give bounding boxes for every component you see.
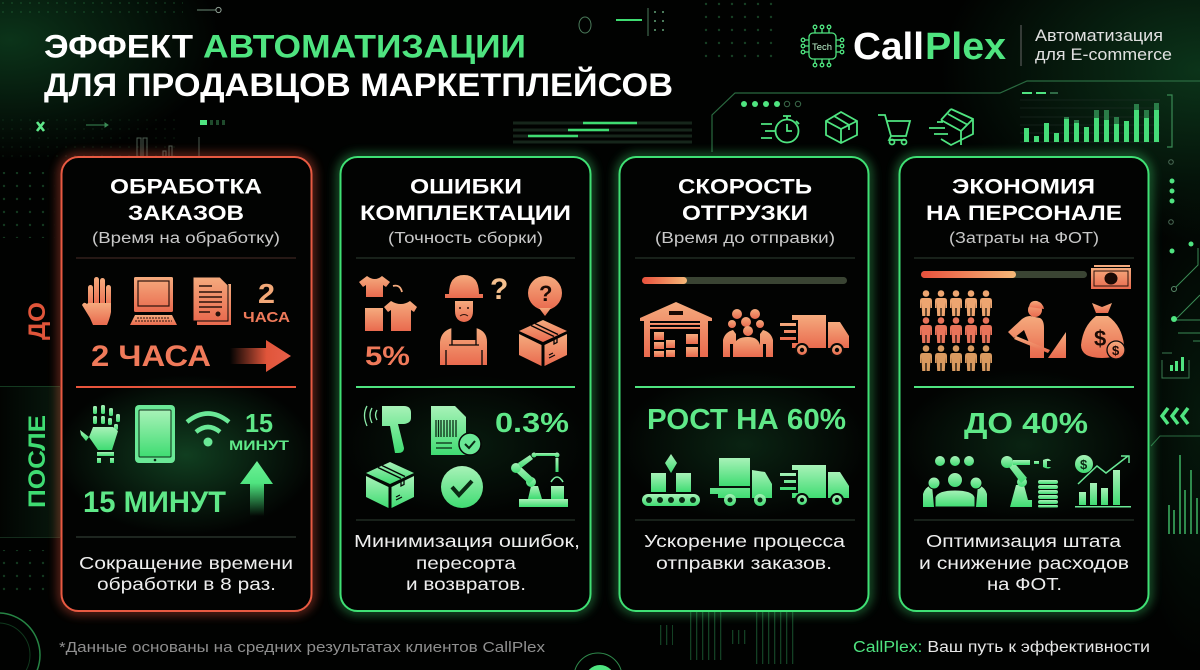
icon: question mark: ? bbox=[490, 273, 508, 306]
description: на ФОТ. bbox=[987, 574, 1062, 594]
icon: hand bbox=[82, 277, 111, 325]
before value: 2 часа small: 2 bbox=[258, 278, 275, 309]
status dots bbox=[741, 101, 801, 107]
side label: ДО: ДО bbox=[24, 302, 51, 340]
progress bar bbox=[921, 271, 1087, 278]
icon: chip: Tech bbox=[812, 42, 832, 52]
icon: money bag: $ bbox=[1112, 343, 1120, 358]
side label: ПОСЛЕ: ПОСЛЕ bbox=[24, 415, 51, 508]
icon: box with question: ? bbox=[539, 281, 552, 306]
result: до 40%: ДО 40% bbox=[964, 408, 1088, 440]
icon: green box bbox=[366, 462, 414, 508]
title: АВТОМАТИЗАЦИИ bbox=[203, 28, 526, 64]
description: отправки заказов. bbox=[656, 553, 832, 573]
bar chart bbox=[1020, 93, 1160, 142]
icon: truck red bbox=[780, 315, 849, 357]
value: 5%: 5% bbox=[365, 341, 410, 371]
icon: wifi bbox=[187, 414, 229, 446]
icon: barcode document bbox=[431, 406, 481, 455]
heading: ОТГРУЗКИ bbox=[682, 202, 808, 225]
icon: document bbox=[193, 277, 231, 325]
description: Ускорение процесса bbox=[644, 531, 845, 551]
heading bbox=[926, 176, 1122, 247]
value: 0.3%: 0.3% bbox=[495, 407, 569, 438]
icon: truck green bbox=[780, 465, 849, 507]
heading: НА ПЕРСОНАЛЕ bbox=[926, 202, 1122, 225]
after value: 15 минут small: 15 bbox=[245, 408, 273, 438]
tagline: для E-commerce bbox=[1035, 46, 1172, 64]
icon: conveyor bbox=[642, 454, 700, 506]
wordmark: Call bbox=[853, 26, 924, 68]
icon: staff grid bbox=[920, 290, 992, 371]
decorative circuit bits bbox=[86, 7, 1200, 446]
icon: wrong shirts bbox=[359, 276, 417, 331]
heading: (Точность сборки) bbox=[388, 230, 543, 247]
icon: barcode scanner bbox=[364, 406, 411, 453]
panel: скорость отгрузки bbox=[619, 157, 869, 611]
before value: 2 часа small bbox=[243, 278, 290, 326]
description: и возвратов. bbox=[406, 574, 526, 594]
icon: chip bbox=[801, 25, 844, 67]
description bbox=[919, 531, 1129, 594]
icon: check circle bbox=[441, 466, 483, 508]
footer slogan: CallPlex: Ваш путь к эффективности bbox=[853, 639, 1150, 656]
icon: box with speed bbox=[929, 109, 973, 145]
description: Минимизация ошибок, bbox=[354, 531, 580, 551]
icon: computer bbox=[130, 277, 177, 325]
after value: 15 минут: 15 МИНУТ bbox=[83, 486, 226, 519]
description: Оптимизация штата bbox=[926, 531, 1121, 551]
icon: finance growth bbox=[1075, 455, 1131, 508]
icon: truck with box bbox=[710, 458, 772, 506]
icon: worker with shovel bbox=[1008, 301, 1066, 358]
before value: 2 часа small: ЧАСА bbox=[243, 309, 290, 326]
title bbox=[44, 28, 673, 103]
heading: (Время до отправки) bbox=[655, 230, 835, 247]
title: ЭФФЕКТ bbox=[44, 28, 193, 64]
wordmark bbox=[853, 26, 1006, 68]
heading: ЭКОНОМИЯ bbox=[952, 176, 1095, 198]
panel: обработка заказов bbox=[56, 157, 316, 611]
arrow: right bbox=[230, 340, 291, 372]
description: и снижение расходов bbox=[919, 553, 1129, 573]
description bbox=[644, 531, 845, 573]
icon: team green bbox=[923, 456, 987, 507]
icon: box outline bbox=[826, 112, 857, 143]
HUD panel bbox=[712, 81, 1200, 152]
icon: box with question bbox=[519, 276, 567, 366]
icon: confused worker bbox=[440, 275, 487, 365]
icon: robot and coins bbox=[1001, 456, 1058, 508]
heading: ОШИБКИ bbox=[410, 176, 522, 198]
before value: 2 часа: 2 ЧАСА bbox=[91, 340, 211, 373]
wordmark: Plex bbox=[925, 26, 1006, 68]
description bbox=[79, 553, 293, 594]
icon: team bbox=[723, 309, 773, 357]
footnote: *Данные основаны на средних результатах клиентов CallPlex bbox=[59, 639, 546, 656]
heading bbox=[92, 176, 280, 247]
heading: СКОРОСТЬ bbox=[678, 176, 812, 198]
heading bbox=[655, 176, 835, 247]
after value: 15 минут small bbox=[229, 408, 290, 453]
after value: 15 минут small: МИНУТ bbox=[229, 437, 290, 453]
result: рост на 60%: РОСТ НА 60% bbox=[647, 404, 846, 436]
heading: ЗАКАЗОВ bbox=[128, 202, 244, 225]
panel: экономия на персонале bbox=[899, 157, 1149, 611]
icon: robot arm bbox=[511, 452, 568, 507]
progress bar bbox=[642, 277, 847, 284]
heading: (Затраты на ФОТ) bbox=[949, 230, 1099, 247]
icon: stopwatch bbox=[761, 116, 799, 142]
description: обработки в 8 раз. bbox=[97, 574, 276, 594]
decorative dots right bbox=[37, 120, 1198, 534]
heading bbox=[360, 176, 571, 247]
description: Сокращение времени bbox=[79, 553, 293, 573]
bottom decorative: arc, waveform, circle bbox=[0, 612, 794, 670]
arrow: up bbox=[240, 461, 273, 516]
description: пересорта bbox=[416, 553, 516, 573]
tagline bbox=[1035, 27, 1172, 64]
icon: robot hand bbox=[80, 405, 120, 463]
logo: CallPlex bbox=[801, 25, 1172, 68]
icon: money bag bbox=[1081, 303, 1125, 359]
icon: cart bbox=[878, 115, 910, 144]
icon: tablet bbox=[135, 405, 175, 463]
heading: (Время на обработку) bbox=[92, 230, 280, 247]
icon: warehouse bbox=[640, 302, 712, 357]
heading: ОБРАБОТКА bbox=[110, 176, 262, 198]
title: ДЛЯ ПРОДАВЦОВ МАРКЕТПЛЕЙСОВ bbox=[44, 67, 673, 103]
heading: КОМПЛЕКТАЦИИ bbox=[360, 202, 571, 225]
icon: finance growth: $ bbox=[1080, 457, 1088, 472]
icon: money bag: $ bbox=[1094, 326, 1106, 351]
tagline: Автоматизация bbox=[1035, 27, 1163, 45]
icon: banknote bbox=[1091, 265, 1131, 289]
description bbox=[354, 531, 580, 594]
panel: ошибки комплектации bbox=[340, 157, 590, 611]
